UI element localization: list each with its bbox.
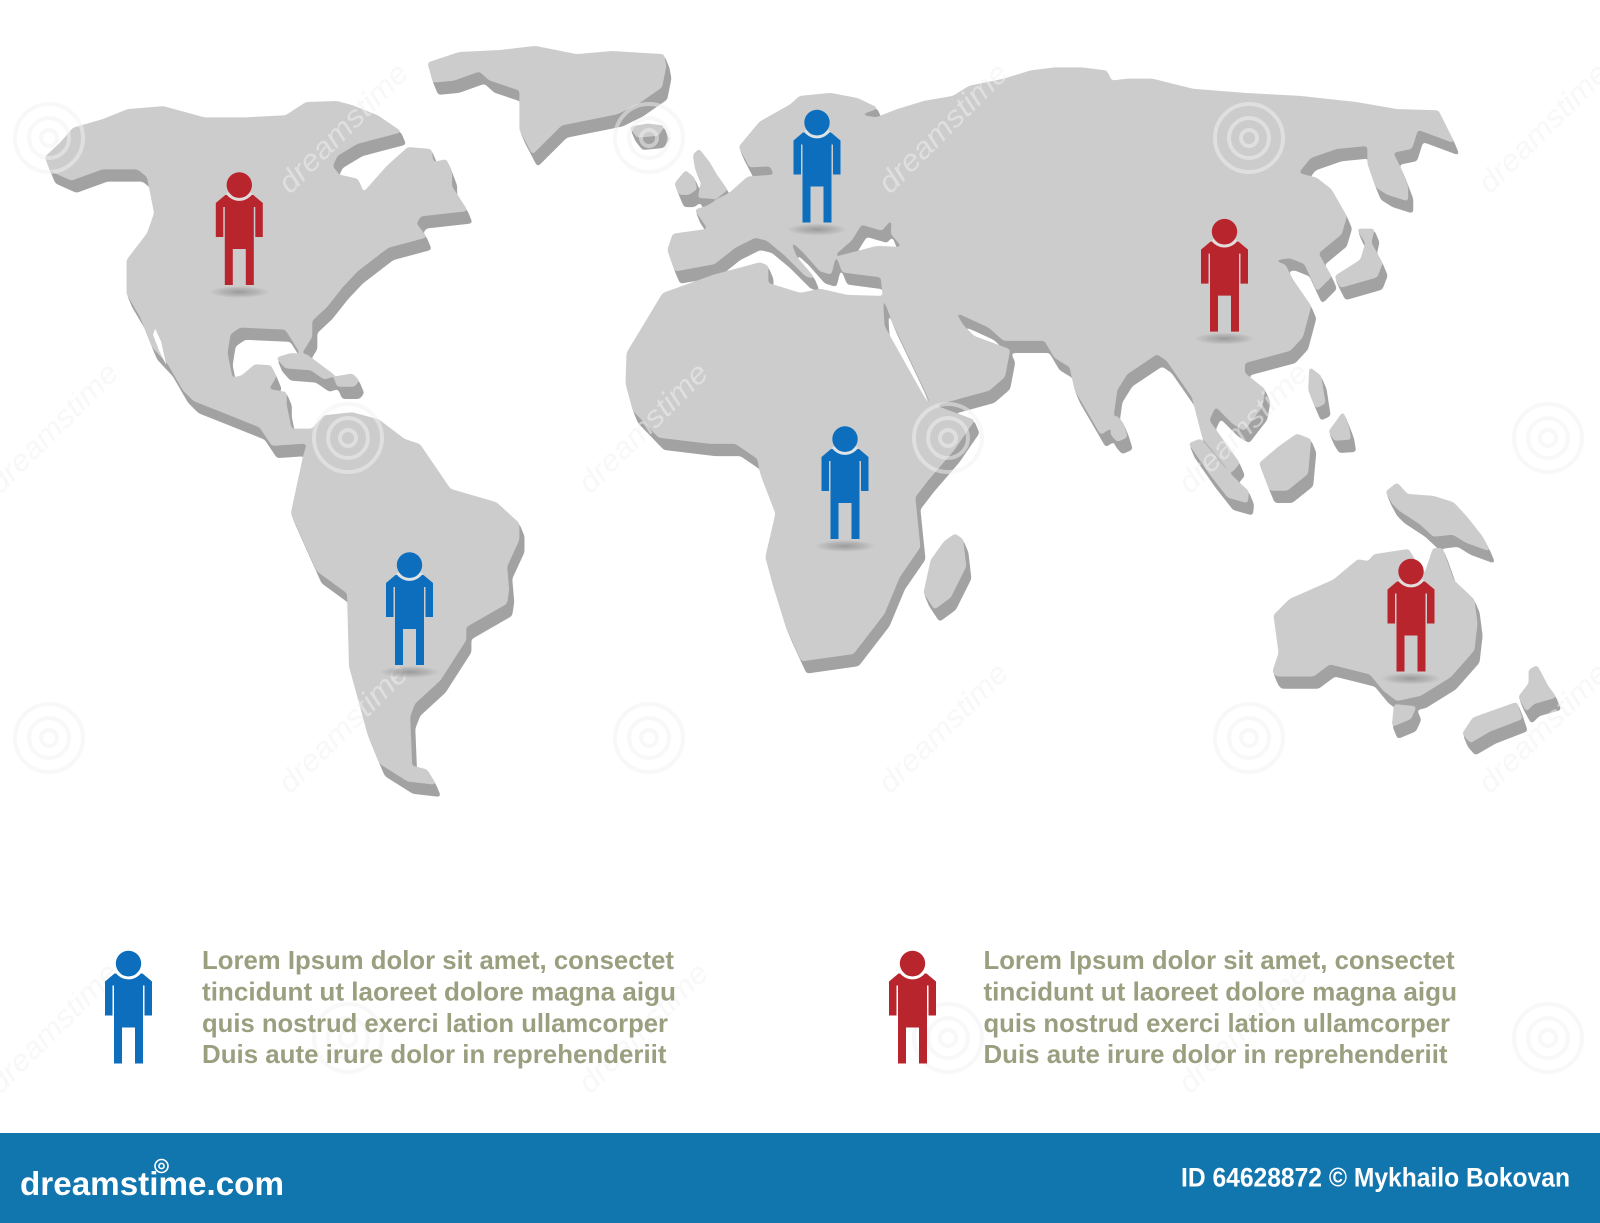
legend: blue text block: quis nostrud exerci lation ullamcorper (202, 1008, 668, 1038)
Eurasia (668, 68, 1453, 471)
Sri Lanka (1111, 416, 1127, 441)
Iceland (631, 124, 663, 137)
footer logo text: dreamstime.com (20, 1165, 284, 1202)
legend: blue text block: tincidunt ut laoreet dolore magna aigu (202, 976, 676, 1006)
legend: red text block: Duis aute irure dolor in reprehenderiit (984, 1039, 1448, 1069)
world map (46, 47, 1560, 796)
Africa (627, 263, 973, 660)
icon: red person, Australia (1381, 559, 1441, 684)
icon: logo spiral (155, 1160, 168, 1172)
Greenland (429, 47, 665, 153)
New Guinea (1387, 484, 1489, 550)
Great Britain (694, 150, 727, 198)
Ireland (676, 171, 696, 194)
legend: red person icon (889, 951, 936, 1064)
legend: red text block: Lorem Ipsum dolor sit amet, consectet (984, 945, 1455, 975)
Baja gulf (153, 329, 166, 365)
legend: red text block (984, 945, 1457, 1069)
icon: red person, Asia (1194, 219, 1254, 345)
North America (46, 102, 466, 445)
footer credit: ID 64628872 © Mykhailo Bokovan (1181, 1162, 1570, 1192)
Caribbean islands (278, 354, 358, 386)
legend: red text block: quis nostrud exerci lation ullamcorper (984, 1008, 1450, 1038)
Borneo (1260, 435, 1310, 490)
Madagascar (924, 535, 965, 608)
legend: blue text block: Lorem Ipsum dolor sit amet, consectet (202, 945, 674, 975)
Sumatra (1190, 440, 1248, 502)
icon: blue person, South America (380, 552, 440, 678)
South America (292, 413, 518, 784)
watermark text: dreamstime (272, 656, 415, 800)
watermark text: dreamstime (1172, 956, 1315, 1100)
watermark text: dreamstime (872, 656, 1015, 800)
watermark spirals (15, 104, 1582, 1072)
legend: blue text block (202, 945, 676, 1069)
Philippines (1309, 368, 1350, 440)
footer bar (0, 1133, 1600, 1223)
icon: red person, North America (209, 172, 269, 298)
legend: red text block: tincidunt ut laoreet dolore magna aigu (984, 976, 1457, 1006)
watermark text: dreamstime (572, 356, 715, 500)
Australia (1273, 549, 1477, 700)
New Zealand (1463, 666, 1555, 742)
watermark text: dreamstime (572, 956, 715, 1100)
watermark text: dreamstime (272, 56, 415, 200)
icon: blue person, Europe (787, 110, 847, 236)
Japan (1336, 230, 1382, 287)
icon: blue person, Africa (815, 426, 875, 552)
legend: blue text block: Duis aute irure dolor in reprehenderiit (202, 1039, 667, 1069)
Tasmania (1393, 705, 1415, 726)
watermark text: dreamstime (872, 56, 1015, 200)
legend: blue person icon (105, 951, 152, 1064)
watermark text: dreamstime (1172, 356, 1315, 500)
